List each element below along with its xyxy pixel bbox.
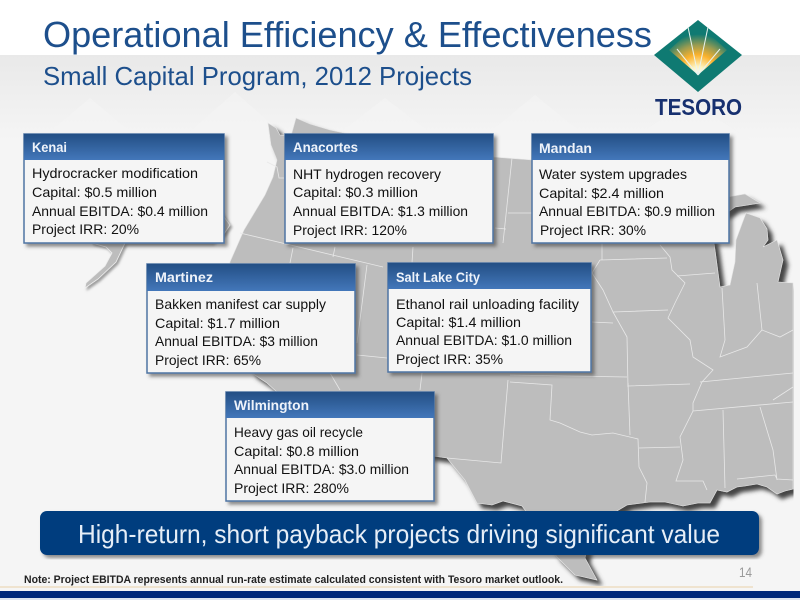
panel: Kenai: Kenai: [32, 139, 67, 155]
panel: Martinez: Martinez: [155, 269, 213, 285]
panel: Wilmington: Capital: $0.8 million: [234, 443, 359, 459]
panel: Salt Lake City: Project IRR: 35%: [396, 351, 503, 367]
panel: Mandan: [532, 134, 729, 243]
panel: Martinez: Project IRR: 65%: [155, 352, 261, 368]
panel: Kenai: Project IRR: 20%: [32, 221, 139, 237]
panel: Kenai: Annual EBITDA: $0.4 million: [32, 203, 208, 219]
map: United States: [80, 118, 793, 580]
callout banner: High-return, short payback projects driving significant value: [78, 519, 720, 549]
panel: Martinez: Annual EBITDA: $3 million: [155, 333, 318, 349]
footer bar: [0, 591, 800, 598]
panel: Kenai: Hydrocracker modification: [32, 165, 198, 181]
panel: Salt Lake City: Capital: $1.4 million: [396, 314, 521, 330]
icon: teal diamond: [654, 20, 742, 92]
panel: Wilmington: Wilmington: [234, 397, 309, 413]
panel: Anacortes: Annual EBITDA: $1.3 million: [293, 203, 468, 219]
panel: Wilmington: [226, 392, 434, 501]
panel: Anacortes: Anacortes: [293, 139, 358, 155]
panel: Kenai: Capital: $0.5 million: [32, 184, 157, 200]
map: Alaska: [80, 200, 230, 288]
footer rule: [0, 586, 753, 588]
panel: Wilmington: Project IRR: 280%: [234, 480, 349, 496]
panel: Martinez: Bakken manifest car supply: [155, 296, 326, 312]
panel: Salt Lake City: Ethanol rail unloading facility: [396, 296, 579, 312]
panel: Anacortes: [285, 134, 493, 243]
logo: Tesoro: [654, 20, 742, 120]
panel: Salt Lake City: Salt Lake City: [396, 269, 480, 285]
panel: Mandan: Mandan: [539, 140, 592, 156]
logo wordmark: TESORO: [655, 94, 742, 120]
panel: Salt Lake City: Annual EBITDA: $1.0 million: [396, 332, 572, 348]
icon: sunburst: [669, 24, 727, 75]
panel: Martinez: Capital: $1.7 million: [155, 315, 280, 331]
panel: Kenai: [24, 134, 224, 243]
panel: Mandan: Annual EBITDA: $0.9 million: [539, 203, 715, 219]
subtitle: Small Capital Program, 2012 Projects: [43, 61, 472, 91]
panel: Mandan: Project IRR: 30%: [540, 222, 646, 238]
footnote: Note: Project EBITDA represents annual run-rate estimate calculated consistent with Tesoro market outlook.: [24, 574, 563, 586]
page number: 14: [739, 564, 752, 580]
panel: Anacortes: NHT hydrogen recovery: [293, 166, 441, 182]
title: Operational Efficiency & Effectiveness: [43, 14, 652, 55]
panel: Mandan: Water system upgrades: [539, 166, 687, 182]
map: state borders: [240, 158, 793, 502]
panel: Martinez: [147, 264, 355, 373]
panel: Salt Lake City: [388, 263, 591, 372]
panel: Wilmington: Heavy gas oil recycle: [234, 424, 363, 440]
panel: Anacortes: Capital: $0.3 million: [293, 184, 418, 200]
panel: Mandan: Capital: $2.4 million: [539, 185, 664, 201]
panel: Wilmington: Annual EBITDA: $3.0 million: [234, 461, 409, 477]
map: contiguous states: [228, 118, 793, 580]
panel: Anacortes: Project IRR: 120%: [293, 222, 407, 238]
callout banner: [40, 511, 759, 555]
